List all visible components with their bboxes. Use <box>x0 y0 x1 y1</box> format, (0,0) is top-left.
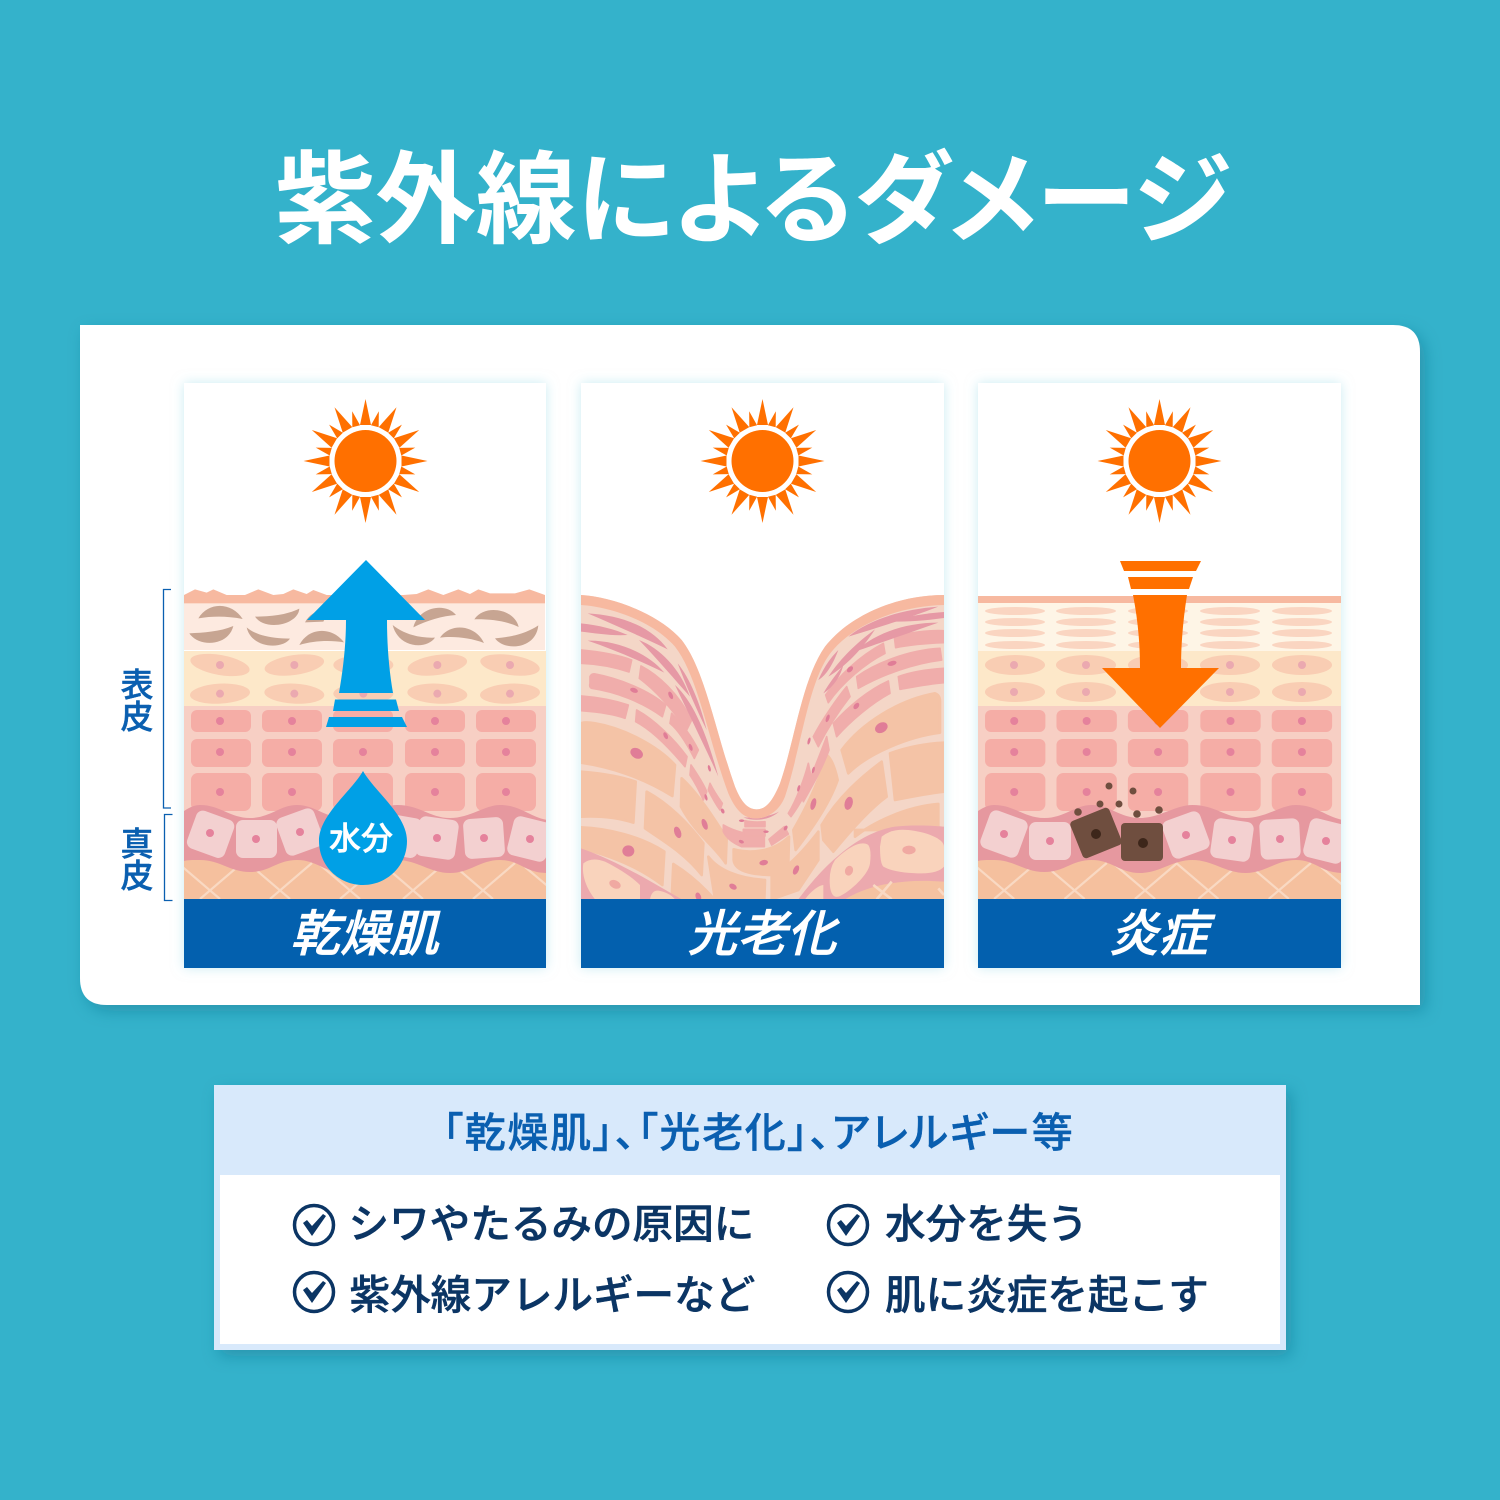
label bar: photoaging <box>581 899 944 968</box>
skin layer labels <box>120 590 172 900</box>
panel: dry skin <box>178 383 554 968</box>
label bar: dry skin: 乾燥肌 <box>290 907 441 962</box>
panel: photoaging <box>581 383 944 968</box>
summary heading: 「乾燥肌」、「光老化」、アレルギー等 <box>442 1110 1074 1156</box>
skin layer labels: 皮 <box>120 858 154 894</box>
label bar: dry skin <box>184 899 546 968</box>
wrinkle cross-section <box>581 595 944 902</box>
title: 紫外線によるダメージ <box>275 145 1231 257</box>
label bar: inflammation: 炎症 <box>1109 907 1216 962</box>
label bar: inflammation <box>978 899 1341 968</box>
icon: water drop: 水分 <box>329 820 393 856</box>
main white panel <box>80 325 1420 1005</box>
skin cross-section <box>178 589 554 899</box>
skin layer labels: 皮 <box>120 698 154 736</box>
icon: sun <box>304 399 428 523</box>
label bar: photoaging: 光老化 <box>688 907 840 962</box>
item: inflammation: 肌に炎症を起こす <box>885 1272 1209 1318</box>
icon: water drop <box>319 771 407 885</box>
icon: sun <box>700 399 824 523</box>
icon: moisture escaping arrow <box>307 560 425 727</box>
skin layer labels: 表 <box>120 666 154 704</box>
checklist <box>220 1175 1280 1344</box>
item: wrinkles: シワやたるみの原因に <box>348 1201 754 1247</box>
skin cross-section <box>972 596 1350 899</box>
item: moisture loss: 水分を失う <box>885 1201 1088 1247</box>
item: UV allergy: 紫外線アレルギーなど <box>350 1272 755 1318</box>
icon: sun <box>1098 399 1222 523</box>
melanin cells <box>1069 782 1163 861</box>
icon: UV arrow <box>1102 561 1219 728</box>
panel: inflammation <box>972 383 1350 968</box>
skin layer labels: 真 <box>120 826 154 862</box>
summary box <box>214 1085 1286 1350</box>
